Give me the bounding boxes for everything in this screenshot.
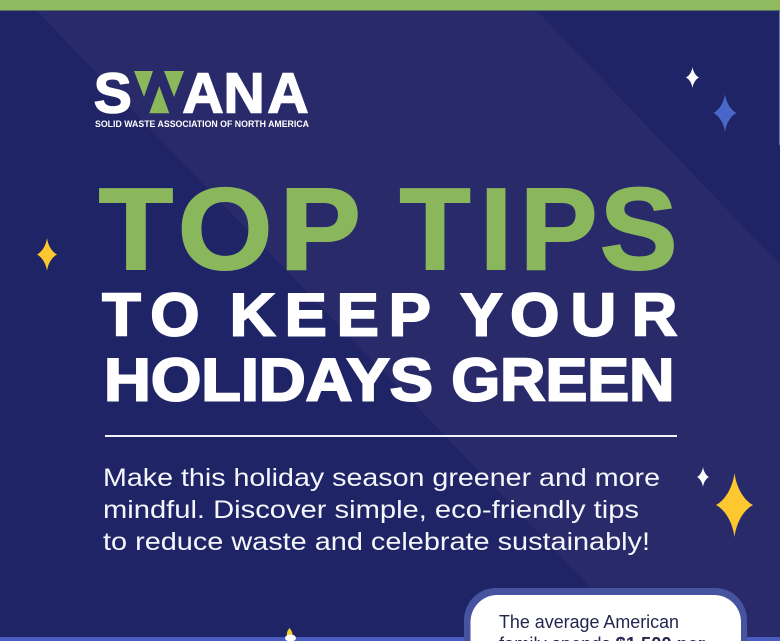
fact bubble: The average American — [499, 611, 679, 632]
SWANA logo: S — [94, 61, 132, 125]
star: blue top — [714, 94, 736, 132]
SWANA logo — [94, 61, 309, 129]
star: yellow left — [37, 238, 57, 271]
logo W triangles — [134, 71, 184, 113]
title: top tips — [99, 164, 677, 294]
SWANA logo: ANA — [182, 61, 309, 125]
title: top tips: TOP — [99, 165, 361, 294]
fact bubble — [464, 588, 747, 641]
divider — [105, 435, 677, 437]
title: top tips: TIPS — [400, 164, 677, 294]
top green bar — [0, 0, 780, 10]
intro paragraph: to reduce waste and celebrate sustainably! — [103, 528, 650, 556]
subtitle line 1: TO KEEP YOUR — [102, 282, 677, 349]
subtitle line 2 — [104, 346, 674, 414]
bottom blue stripe — [0, 637, 780, 641]
subtitle line 2: HOLIDAYS — [104, 346, 433, 414]
intro paragraph: mindful. Discover simple, eco-friendly tips — [103, 496, 639, 524]
intro paragraph — [103, 464, 660, 556]
intro paragraph: Make this holiday season greener and more — [103, 464, 660, 492]
SWANA logo: SOLID WASTE ASSOCIATION OF NORTH AMERICA — [95, 119, 309, 129]
star: yellow right — [716, 473, 753, 537]
candle flame — [285, 628, 296, 641]
star: white top — [686, 67, 699, 88]
subtitle line 2: GREEN — [451, 346, 674, 414]
star: white right — [697, 467, 709, 487]
